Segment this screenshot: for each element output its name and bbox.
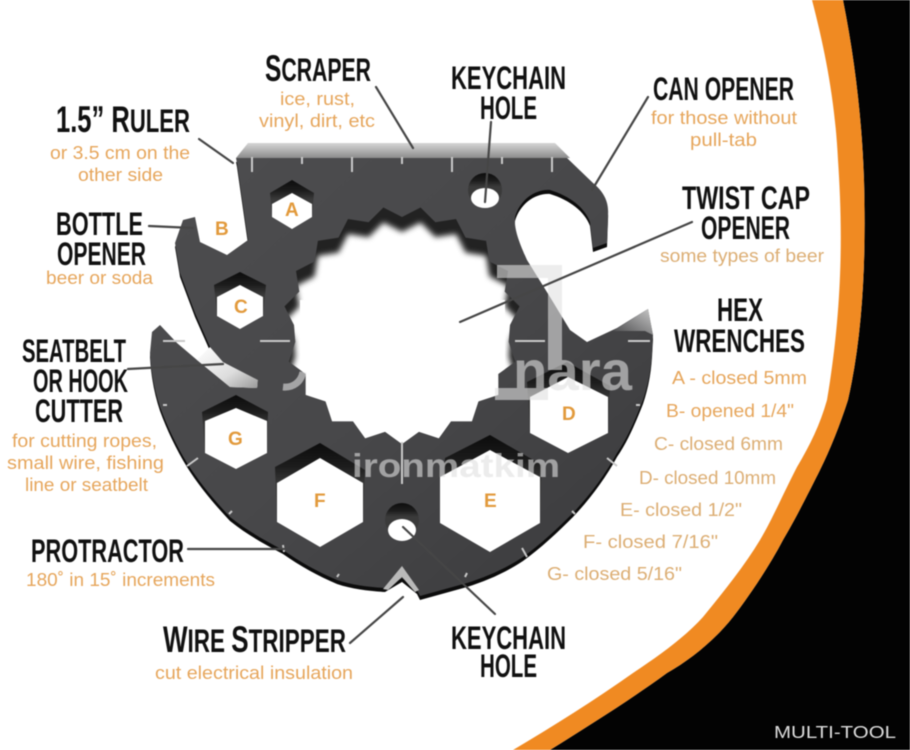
hex hole E: E [484, 491, 497, 512]
leader line: protractor [188, 548, 284, 550]
label: seatbelt or hook cutter: OR HOOK [33, 363, 128, 399]
hex hole D: D [562, 404, 576, 425]
leader line: wire stripper [350, 597, 403, 643]
label: bottle opener: BOTTLE [56, 206, 143, 242]
label: hex wrenches: B- opened 1/4" [666, 400, 794, 421]
hex hole C: C [234, 297, 248, 318]
seatbelt cutter sheen [197, 347, 258, 388]
brand label: MULTI-TOOL [774, 722, 896, 742]
label: seatbelt or hook cutter: for cutting ropes, [12, 430, 157, 451]
label: can opener: for those without [651, 107, 797, 128]
label: bottle opener [46, 206, 154, 288]
leader line: seatbelt cutter [128, 364, 223, 369]
hex hole G [202, 395, 268, 469]
protractor ticks [163, 341, 650, 577]
wire stripper notch highlight [383, 566, 419, 592]
label: ruler: other side [78, 164, 163, 185]
leader line: top keychain hole [485, 122, 491, 202]
right tip highlight [613, 309, 653, 335]
leader line: twist cap opener [460, 222, 692, 322]
label: scraper: vinyl, dirt, etc [259, 110, 375, 131]
label: scraper: ice, rust, [280, 88, 355, 109]
watermark: ironmatkim [352, 447, 560, 484]
bottom keychain hole [385, 503, 419, 541]
label: bottle opener: OPENER [57, 236, 146, 272]
label: bottom keychain hole [451, 620, 566, 684]
leader line: scraper [376, 87, 413, 148]
label: hex wrenches: C- closed 6mm [654, 433, 783, 454]
scraper edge highlight [236, 143, 570, 158]
leader line: ruler [199, 139, 233, 163]
label: bottle opener: beer or soda [46, 267, 154, 288]
background: orange arc band [513, 0, 865, 750]
label: top keychain hole: KEYCHAIN [451, 60, 566, 96]
hex hole E [440, 435, 542, 552]
label: top keychain hole [451, 60, 566, 126]
top keychain hole [468, 173, 502, 208]
multi-tool body [150, 143, 653, 600]
tool face [150, 158, 653, 596]
label: protractor: 180˚ in 15˚ increments [26, 569, 215, 590]
label: scraper [259, 48, 375, 131]
label: can opener: CAN OPENER [653, 71, 794, 107]
hex hole G: G [228, 429, 243, 450]
central twist cap opening [284, 208, 520, 444]
label: seatbelt or hook cutter: line or seatbelt [25, 474, 148, 495]
leader line: can opener [592, 97, 648, 190]
label: seatbelt or hook cutter: SEATBELT [22, 333, 126, 369]
ruler ticks [252, 157, 552, 172]
label: seatbelt or hook cutter [7, 333, 164, 495]
hex hole A [270, 180, 314, 229]
label: bottom keychain hole: HOLE [480, 648, 537, 684]
watermark: nara [513, 339, 633, 402]
leader line: bottom keychain hole [403, 527, 495, 614]
label: ruler [50, 99, 190, 185]
label: twist cap opener: TWIST CAP [682, 180, 810, 216]
hex hole C [214, 272, 266, 329]
label: seatbelt or hook cutter: CUTTER [35, 393, 123, 429]
label: twist cap opener: OPENER [701, 210, 790, 246]
label: protractor: PROTRACTOR [31, 533, 184, 569]
label: hex wrenches: F- closed 7/16" [583, 531, 718, 552]
label: can opener: pull-tab [690, 129, 757, 150]
label: ruler: or 3.5 cm on the [50, 142, 190, 163]
label: hex wrenches [547, 292, 807, 584]
bottle opener B letter: B [215, 219, 229, 240]
label: hex wrenches: A - closed 5mm [672, 367, 807, 388]
background: black corner [550, 0, 910, 750]
label: hex wrenches: HEX [717, 292, 763, 328]
label: twist cap opener [660, 180, 824, 266]
leader line: bottle opener [149, 226, 193, 228]
hex hole F [275, 443, 365, 547]
label: top keychain hole: HOLE [480, 90, 537, 126]
label: can opener [651, 71, 797, 150]
label: protractor [26, 533, 215, 590]
label: hex wrenches: G- closed 5/16" [547, 563, 682, 584]
label: seatbelt or hook cutter: small wire, fishing [7, 452, 164, 473]
label: hex wrenches: WRENCHES [674, 323, 805, 359]
label: scraper: SCRAPER [265, 48, 371, 89]
label: ruler: 1.5” RULER [56, 99, 190, 140]
label: wire stripper: WIRE STRIPPER [163, 619, 346, 660]
label: twist cap opener: some types of beer [660, 245, 824, 266]
hex hole D [527, 362, 610, 453]
label: hex wrenches: E- closed 1/2" [620, 499, 742, 520]
watermark [283, 265, 633, 484]
hex hole A: A [285, 200, 299, 221]
label: bottom keychain hole: KEYCHAIN [451, 620, 566, 656]
label: hex wrenches: D- closed 10mm [639, 467, 776, 488]
label: wire stripper: cut electrical insulation [155, 662, 353, 683]
label: wire stripper [155, 619, 353, 683]
hex hole F: F [314, 491, 326, 512]
tool rim shadow [150, 162, 653, 600]
